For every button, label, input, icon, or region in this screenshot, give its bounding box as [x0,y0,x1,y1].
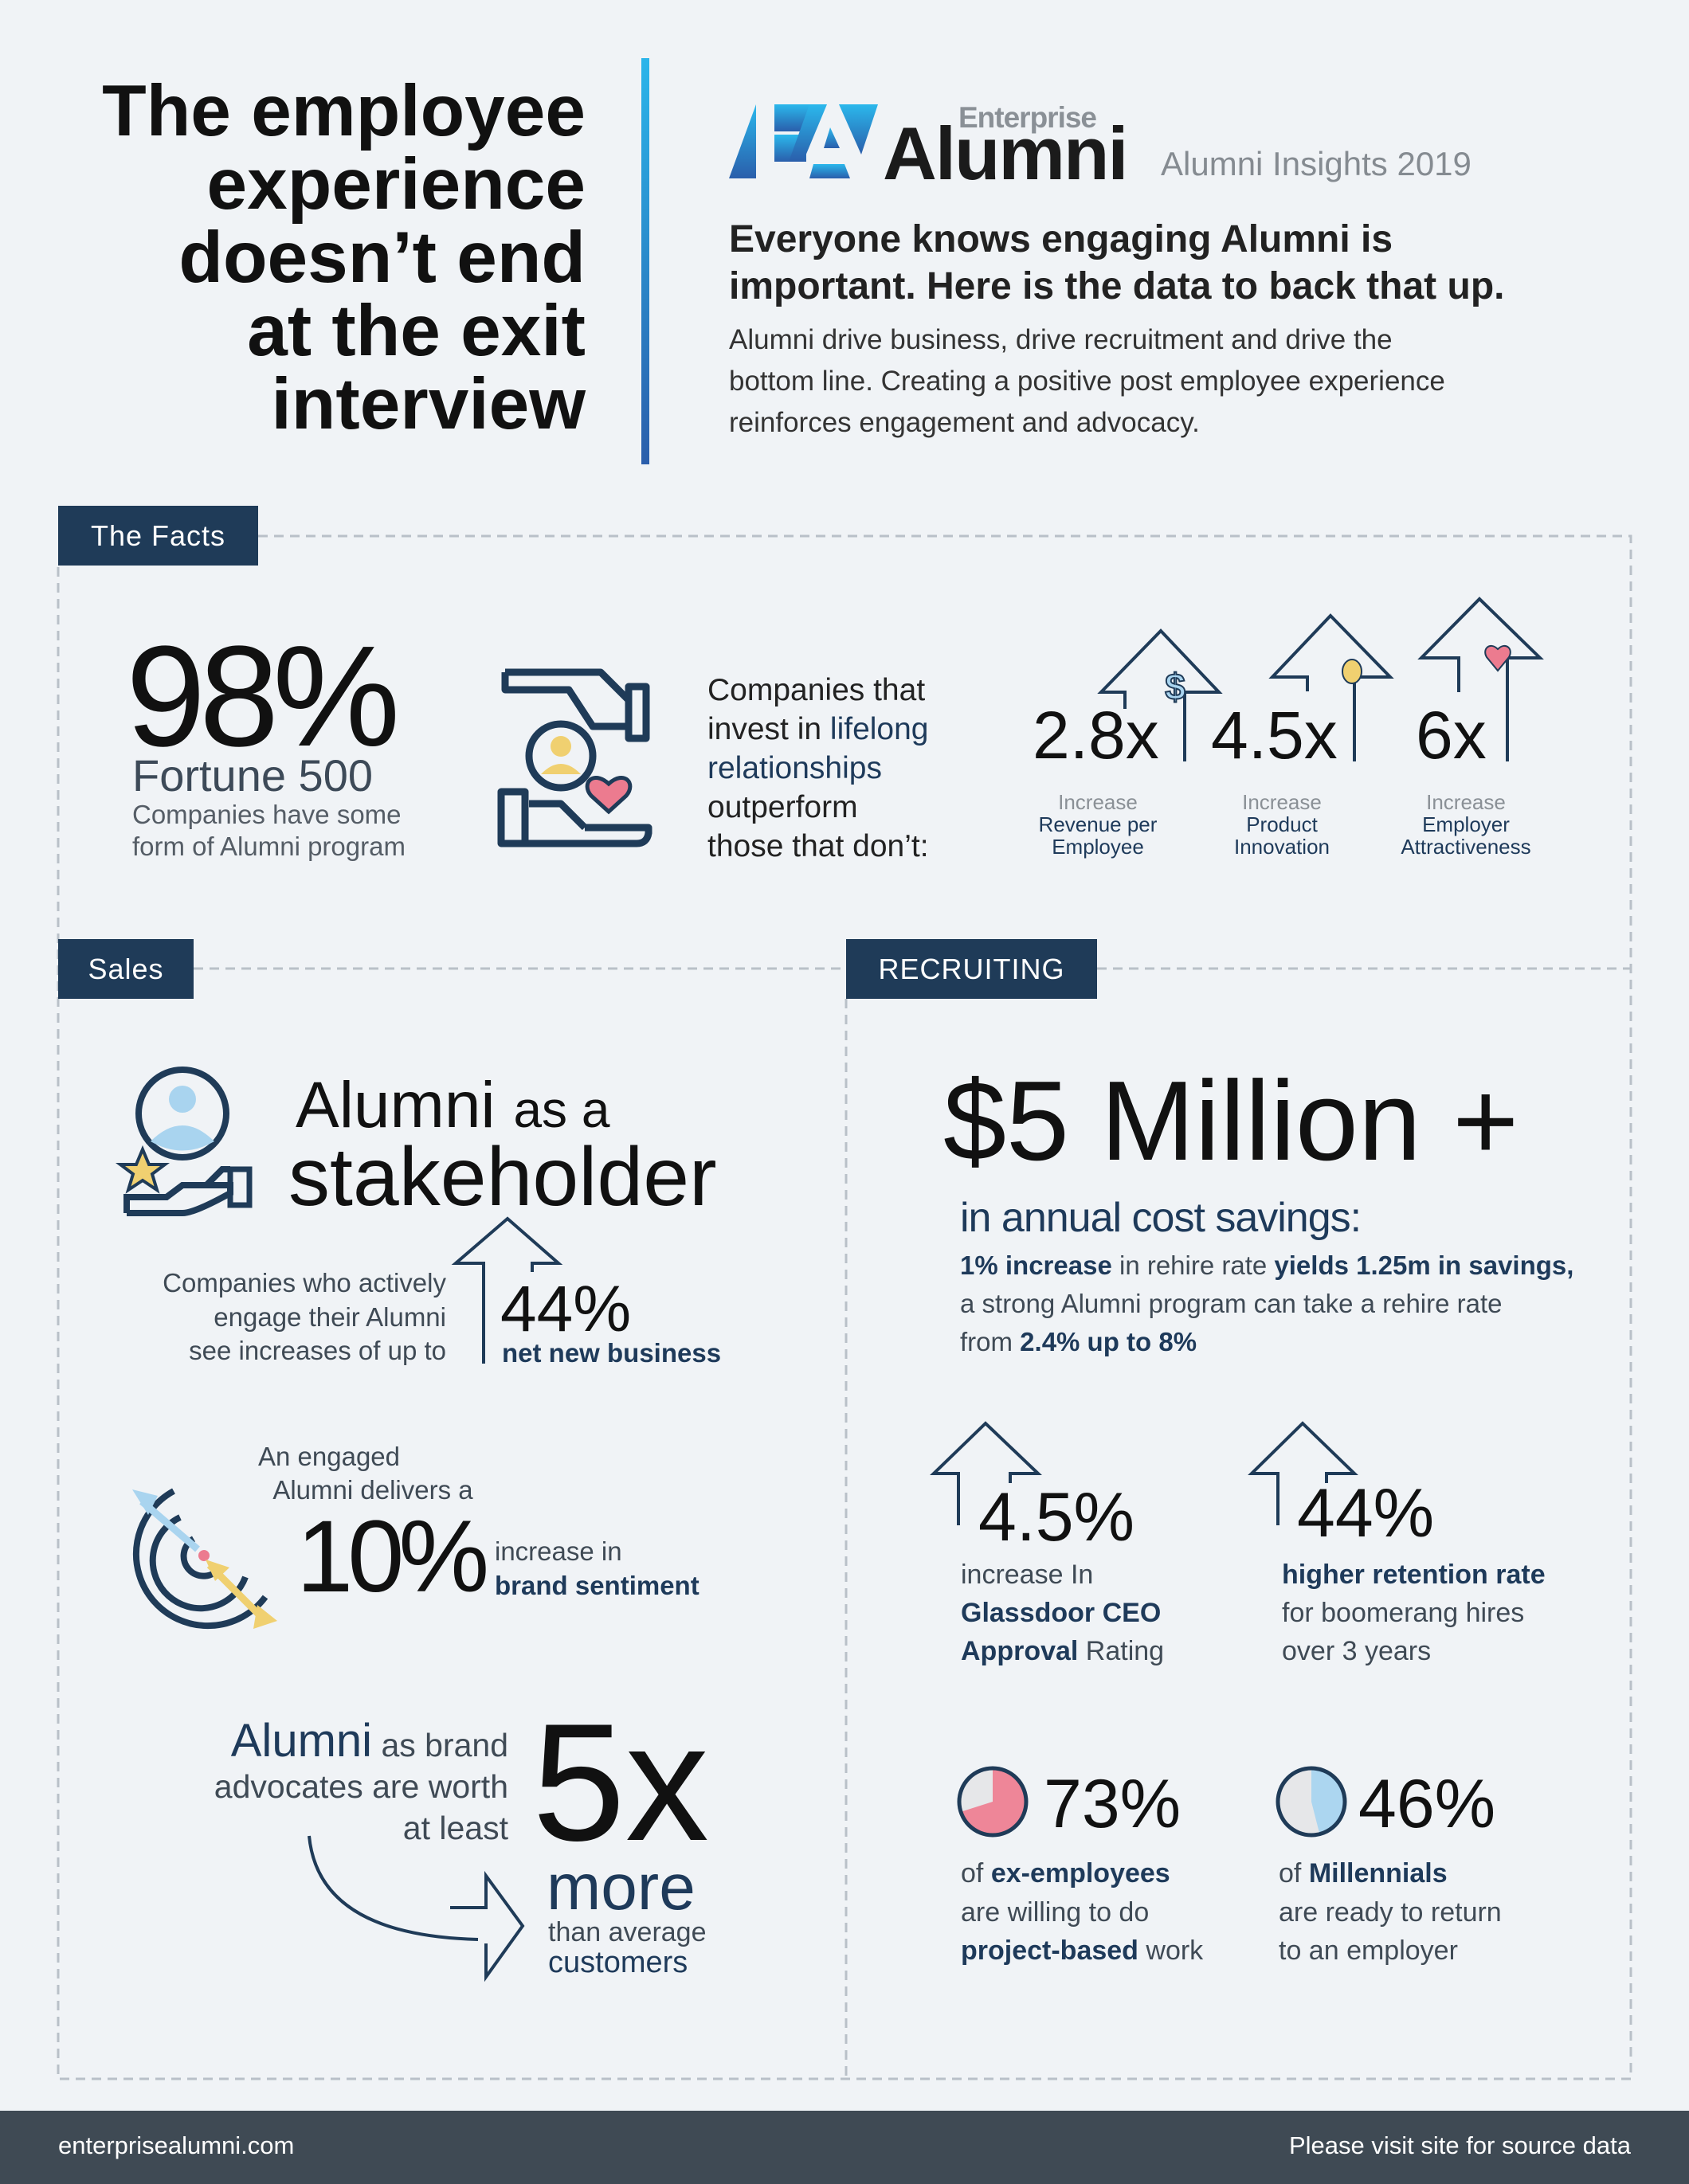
label: revenue [1039,790,1157,859]
text: rehire rate [960,1251,1573,1356]
title: at the exit [247,291,586,371]
text: companies that invest: those that don’t: [707,829,929,863]
label: innovation: Product [1246,812,1318,836]
label: innovation: Increase [1242,790,1322,814]
label: glassdoor [961,1560,1164,1666]
icon: stakeholder hand [116,1067,252,1216]
tab: sales [58,939,194,999]
text: an engaged alumni: Alumni delivers a [272,1475,473,1505]
text: an engaged alumni: An engaged [258,1442,400,1471]
arrows: facts multipliers: $ [1165,666,1185,707]
title: The employee [102,71,586,151]
logo: Enterprise [958,101,1096,134]
heading: alumni as a stakeholder: stakeholder [288,1131,717,1223]
pie: 46% [1276,1767,1346,1837]
label: revenue: Employee [1052,835,1144,859]
stat: 2.8x: 2.8x [1033,698,1159,773]
stat: 44% retention: 44% [1297,1475,1434,1552]
headline: important. Here is the data to back that up. [729,265,1504,307]
label: millennials: of Millennials [1279,1858,1448,1888]
label: more than average customers: more [547,1851,696,1924]
tab: sales: Sales [88,953,164,984]
intro text: Alumni drive business, drive recruitment and drive the [729,324,1393,355]
text: companies engage: Companies who actively [163,1268,446,1297]
label: net new business: net new business [502,1338,721,1368]
label: ex-employees [961,1858,1203,1966]
label: ex-employees: project-based work [961,1935,1203,1966]
stat: 5x: 5x [532,1689,709,1876]
label: glassdoor: increase In [961,1560,1093,1590]
text: alumni as brand advocates: at least [403,1810,508,1846]
label: brand sentiment: brand sentiment [495,1571,700,1600]
pie: 73% [958,1767,1028,1837]
text: companies engage: engage their Alumni [214,1301,446,1332]
title: experience [206,144,586,225]
tab: the facts [58,506,258,566]
stat: 98%: Fortune 500 [132,750,373,800]
label: innovation [1234,790,1330,859]
label: more than average customers [547,1851,706,1979]
text: companies that invest: Companies that [707,673,925,707]
title: interview [272,364,586,444]
tab: the facts: The Facts [91,519,225,551]
heading: alumni as a stakeholder: Alumni as a [296,1069,609,1141]
label: attractiveness: Employer [1422,812,1510,836]
label: revenue: Revenue per [1039,812,1157,836]
text: rehire rate: 1% increase in rehire rate yields 1.25m in savings, [960,1251,1573,1280]
stat: 73%: 73% [1044,1766,1181,1842]
footer: Please visit site for source data [1289,2131,1631,2159]
label: glassdoor: Glassdoor CEO [961,1598,1161,1628]
logo [729,101,1127,195]
tab: recruiting [846,939,1097,999]
label: brand sentiment: increase in [495,1536,622,1566]
text: alumni as brand advocates [214,1715,508,1846]
label: retention: for boomerang hires [1282,1598,1524,1628]
divider bar [641,58,649,464]
text: companies that invest: relationships [707,751,882,785]
label: retention [1282,1560,1546,1666]
text: companies engage [163,1268,446,1365]
heading: annual cost savings: in annual cost savings: [960,1195,1361,1241]
label: more than average customers: than average [548,1917,706,1947]
label: innovation: Innovation [1234,835,1330,859]
text: an engaged alumni [258,1442,473,1505]
label: millennials [1279,1858,1502,1966]
label: retention: higher retention rate [1282,1560,1546,1590]
footer [0,2111,1689,2184]
stat: 4.5x: 4.5x [1211,698,1338,773]
subtitle: alumni insights: Alumni Insights 2019 [1161,145,1472,182]
intro text [729,324,1445,438]
heading: alumni as a stakeholder [288,1069,717,1223]
label: revenue: Increase [1058,790,1138,814]
arrow: net new business [451,1216,562,1364]
text: companies engage: see increases of up to [189,1336,446,1365]
stat: 98%: form of Alumni program [132,832,406,861]
label: more than average customers: customers [548,1946,688,1979]
text: companies that invest [707,673,929,863]
stat: 44%: 44% [500,1273,631,1345]
tab: recruiting: RECRUITING [878,953,1064,984]
title: doesn’t end [178,217,586,298]
headline [729,218,1504,307]
label: attractiveness: Attractiveness [1401,835,1531,859]
stat: 46%: 46% [1358,1766,1495,1842]
text: rehire rate: a strong Alumni program can take a rehire rate [960,1289,1503,1318]
headline: Everyone knows engaging Alumni is [729,218,1393,260]
label: attractiveness [1401,790,1531,859]
label: ex-employees: of ex-employees [961,1858,1170,1888]
title [102,71,586,444]
stat: 6x: 6x [1416,698,1487,773]
intro text: bottom line. Creating a positive post employee experience [729,366,1445,397]
text: companies that invest: outperform [707,790,858,824]
icon: target [132,1488,277,1630]
stat: 98%: Companies have some [132,800,402,829]
label: attractiveness: Increase [1426,790,1506,814]
text: alumni as brand advocates: advocates are worth [214,1768,508,1805]
arrows: facts multipliers [1097,597,1544,761]
arrow: curved [308,1835,524,1982]
logo: Alumni [883,112,1127,195]
stat: 98%: 98% [126,616,394,777]
icon: hands with heart [497,669,652,847]
stat: $5 million: $5 Million + [943,1058,1519,1184]
intro text: reinforces engagement and advocacy. [729,407,1200,438]
label: glassdoor: Approval Rating [961,1636,1164,1666]
label: brand sentiment [495,1536,700,1600]
footer: enterprisealumni.com [58,2131,294,2159]
label: retention: over 3 years [1282,1636,1431,1666]
text: companies that invest: invest in lifelong [707,712,929,746]
label: millennials: to an employer [1279,1935,1458,1966]
text: rehire rate: from 2.4% up to 8% [960,1327,1197,1356]
stat: 4.5%: 4.5% [978,1479,1134,1556]
label: millennials: are ready to return [1279,1897,1502,1928]
text: alumni as brand advocates: Alumni as brand [231,1715,508,1767]
stat: 98% [126,616,406,861]
arrows: recruiting [930,1421,1358,1525]
stat: 10%: 10% [296,1500,484,1614]
label: ex-employees: are willing to do [961,1897,1149,1928]
